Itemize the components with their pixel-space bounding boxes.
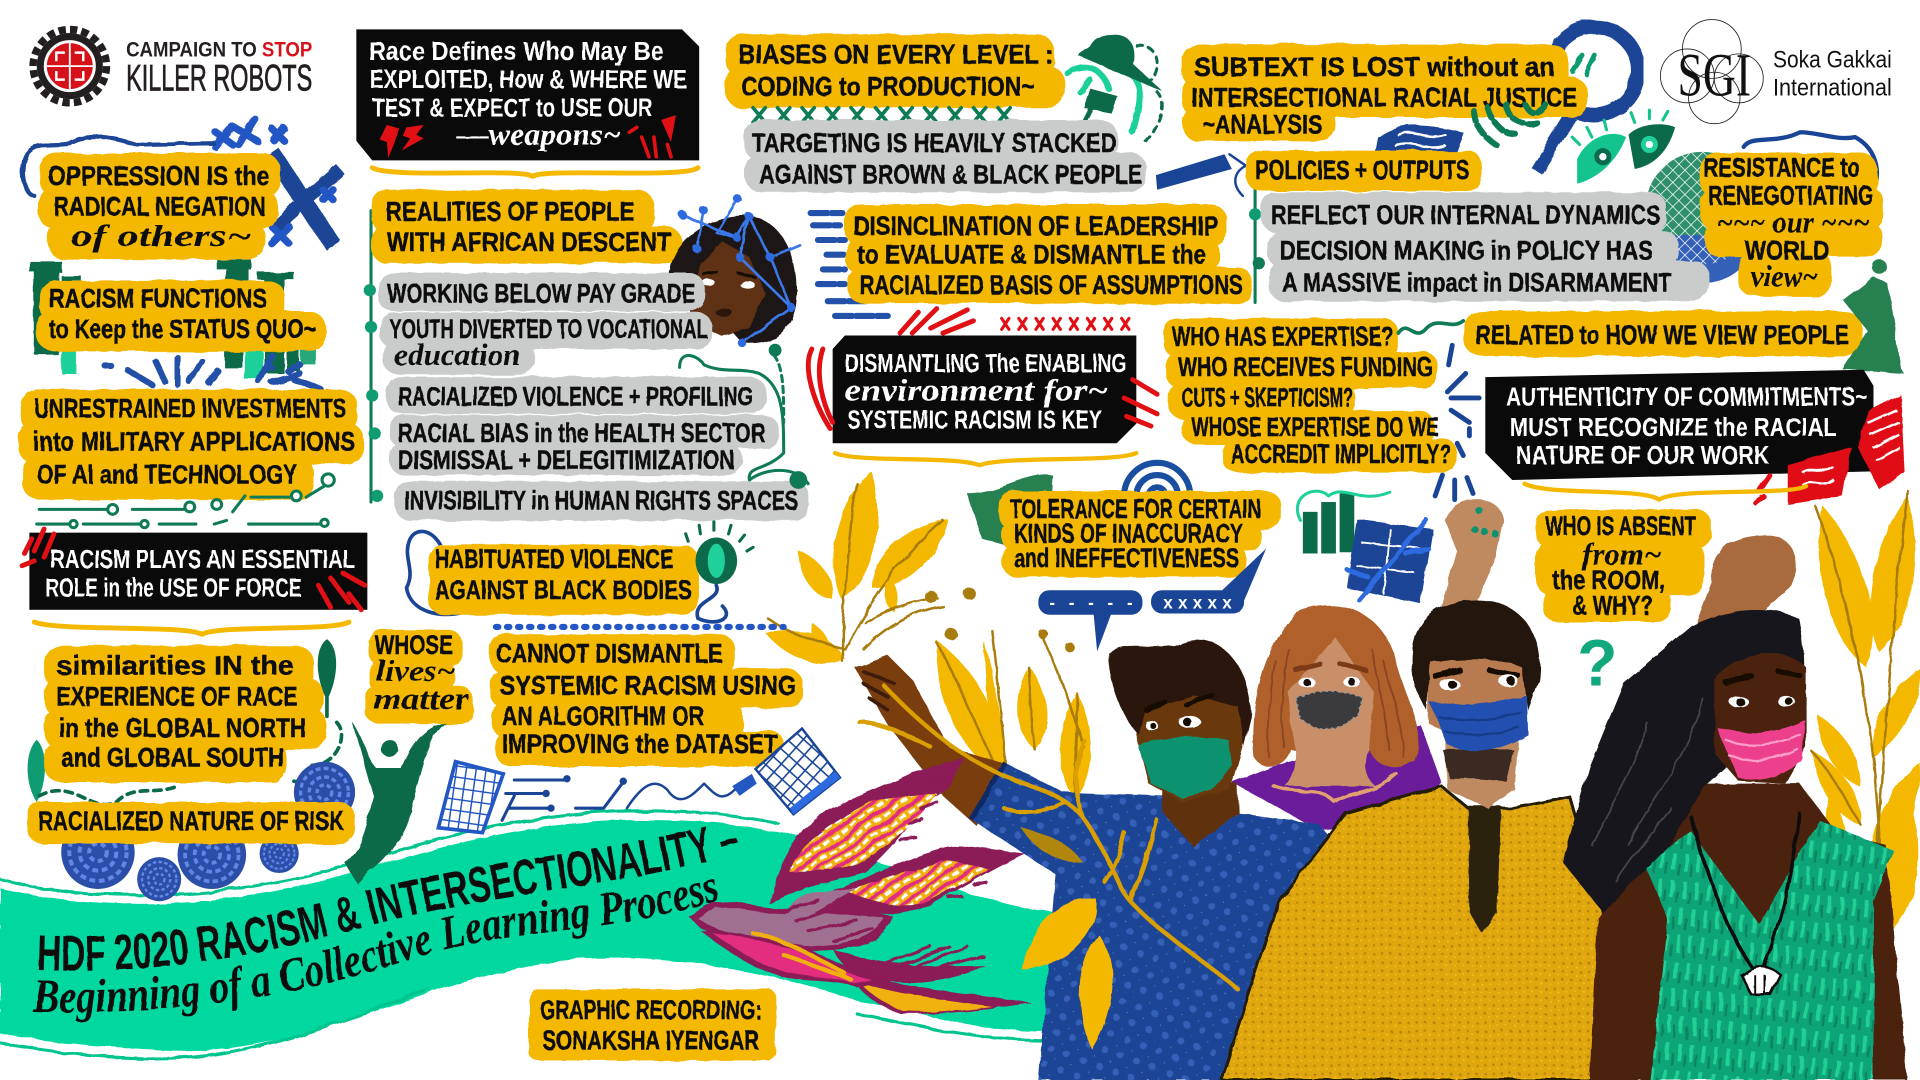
panel: whose lives matter: WHOSE — [375, 630, 453, 660]
panel: similarities in race experience — [44, 645, 327, 782]
panel: who has expertise: ACCREDIT IMPLICITLY? — [1231, 439, 1451, 469]
logo: Soka Gakkai International: International — [1773, 75, 1892, 102]
panel: whose lives matter: matter — [373, 682, 470, 716]
icon: blue flag and fingerprint — [1374, 104, 1545, 157]
panel: racism functions: RACISM FUNCTIONS — [49, 283, 267, 313]
panel: who is absent: WHO IS ABSENT — [1545, 511, 1696, 541]
panel: realities of people with african descent: REALITIES OF PEOPLE — [386, 196, 634, 226]
panel: race defines callout: TEST & EXPECT to USE OUR — [372, 94, 653, 122]
icon: green cross row — [753, 108, 1010, 122]
panel: unrestrained investments: OF AI and TECHNOLOGY — [37, 460, 298, 490]
green title banner — [0, 811, 1056, 1058]
panel: biases on every level — [725, 34, 1065, 108]
icon: blue splash marks — [104, 355, 321, 389]
panel: subtext is lost: SUBTEXT IS LOST without an — [1194, 52, 1555, 82]
panel: racialized nature of risk — [27, 802, 355, 844]
panel: racism functions: to Keep the STATUS QUO~ — [49, 314, 316, 344]
logo: Campaign to Stop Killer Robots: CAMPAIGN TO STOP — [126, 38, 312, 61]
list: working below pay grade: DISMISSAL + DELEGITIMIZATION — [398, 445, 735, 475]
icon: magnifying glass — [1537, 27, 1638, 171]
icon: blue textured balls — [61, 762, 355, 901]
panel: who is absent — [1536, 509, 1712, 622]
list: policy outcomes: REFLECT OUR INTERNAL DYNAMICS — [1271, 200, 1660, 230]
list: policy outcomes — [1261, 192, 1709, 301]
title text: racism and intersectionality: Beginning of a Collective Learning Process — [32, 879, 718, 1022]
panel: race defines callout: —weapons~ — [456, 117, 621, 151]
panel: subtext is lost — [1182, 44, 1587, 141]
panel: subtext is lost: INTERSECTIONAL RACIAL JUSTICE — [1191, 83, 1577, 113]
panel: tolerance for inaccuracy: TOLERANCE FOR CERTAIN — [1010, 494, 1261, 524]
bracket below authenticity — [1524, 484, 1806, 500]
plant: right side leaves — [1802, 491, 1920, 933]
plant: left sprigs — [761, 466, 976, 672]
person: woman with long hair and black mask — [1232, 605, 1441, 830]
panel: who has expertise: WHO RECEIVES FUNDING — [1178, 352, 1433, 382]
icon: blue splash near expertise — [1435, 345, 1479, 500]
person: man with blue mask and yellow kurta — [1221, 500, 1603, 1080]
bracket below race defines callout — [372, 168, 698, 176]
decoration: blue dotted rule — [496, 624, 784, 629]
panel: cannot dismantle: SYSTEMIC RACISM USING — [500, 670, 796, 700]
panel: dismantling the enabling environment — [808, 309, 1157, 443]
list: working below pay grade — [377, 273, 809, 520]
panel: resistance to renegotiating: view~ — [1751, 260, 1818, 294]
panel: racism functions — [37, 280, 326, 351]
icon: blue squiggle above resistance — [1744, 132, 1877, 184]
bracket below dismantling — [835, 453, 1136, 465]
icon: green figure with raised arms — [345, 722, 446, 884]
icon: green squiggle — [680, 345, 808, 487]
panel: tolerance for inaccuracy — [999, 491, 1281, 577]
panel: policies and outputs: POLICIES + OUTPUTS — [1255, 155, 1469, 185]
panel: disinclination of leadership: RACIALIZED BASIS OF ASSUMPTIONS — [860, 270, 1243, 300]
list: working below pay grade: YOUTH DIVERTED TO VOCATIONAL — [389, 314, 708, 344]
panel: who has expertise — [1163, 318, 1457, 473]
panel: oppression statement: OPPRESSION IS the — [48, 161, 269, 191]
icon: green pin markers with dashed trail — [28, 639, 342, 805]
panel: authenticity of commitments: NATURE OF OUR WORK — [1516, 442, 1770, 470]
panel: subtext is lost: ~ANALYSIS — [1202, 109, 1322, 139]
panel: dismantling the enabling environment: environment for~ — [845, 373, 1108, 407]
logo: Campaign to Stop Killer Robots — [33, 29, 312, 103]
panel: racism plays an essential role — [22, 529, 367, 610]
panel: resistance to renegotiating: RESISTANCE to — [1703, 152, 1860, 182]
panel: habituated violence: AGAINST BLACK BODIES — [435, 575, 692, 605]
credit: graphic recording: GRAPHIC RECORDING: — [540, 995, 762, 1025]
panel: resistance to renegotiating — [1700, 152, 1883, 296]
icon: speech bubbles: xxxxx — [1163, 593, 1232, 613]
panel: realities of people with african descent — [364, 190, 682, 502]
panel: targeting is heavily stacked — [743, 120, 1146, 192]
panel: oppression statement: of others~ — [71, 219, 251, 253]
list: policy outcomes: A MASSIVE impact in DISARMAMENT — [1282, 267, 1672, 297]
panel: race defines callout: Race Defines Who May Be — [369, 38, 664, 66]
icon: blue torn document — [1347, 519, 1433, 604]
icon: green eyes — [1572, 110, 1675, 184]
list: working below pay grade: WORKING BELOW PAY GRADE — [387, 278, 696, 308]
list: working below pay grade: RACIAL BIAS in the HEALTH SECTOR — [398, 418, 765, 448]
icon: blue pen — [1156, 154, 1247, 196]
panel: race defines callout: EXPLOITED, How & WHERE WE — [370, 66, 687, 94]
icon: blue keyboard grids and circuit — [438, 729, 840, 833]
icon: bar chart with trend line — [1297, 491, 1390, 553]
panel: similarities in race experience: in the GLOBAL NORTH — [59, 713, 306, 743]
panel: targeting is heavily stacked: TARGETING IS HEAVILY STACKED — [752, 128, 1117, 158]
list: working below pay grade: INVISIBILITY in HUMAN RIGHTS SPACES — [404, 485, 798, 515]
person: man with raised branch, green mask and blue shirt — [855, 640, 1347, 1080]
logo: Campaign to Stop Killer Robots: KILLER ROBOTS — [126, 58, 312, 99]
icon: green question mark: ? — [1577, 627, 1618, 701]
panel: realities of people with african descent: WITH AFRICAN DESCENT — [387, 227, 671, 257]
panel: tolerance for inaccuracy: and INEFFECTIVENESS — [1014, 543, 1239, 573]
logo: Soka Gakkai International: SGI — [1678, 42, 1751, 110]
panel: biases on every level: CODING to PRODUCTION~ — [741, 72, 1035, 102]
panel: racism plays an essential role: ROLE in the USE OF FORCE — [45, 574, 301, 602]
panel: whose lives matter — [365, 629, 473, 724]
panel: disinclination of leadership — [845, 204, 1253, 304]
icon: green book — [967, 475, 1053, 545]
person: woman with curly black hair, pink mask and green dress — [1562, 535, 1908, 1080]
plant: leaves behind the people — [919, 629, 1092, 799]
plant: branch held by the man — [860, 686, 1238, 1050]
panel: cannot dismantle: AN ALGORITHM OR — [502, 701, 704, 731]
panel: disinclination of leadership: to EVALUATE & DISMANTLE the — [857, 239, 1206, 269]
title text: racism and intersectionality: HDF 2020 RACISM & INTERSECTIONALITY – — [38, 826, 738, 971]
icon: speech bubbles — [1038, 549, 1266, 651]
logo: Soka Gakkai International — [1660, 20, 1892, 124]
panel: racialized nature of risk: RACIALIZED NATURE OF RISK — [38, 806, 345, 836]
icon: green columns behind status quo — [29, 260, 316, 380]
panel: policies and outputs — [1245, 151, 1483, 302]
list: policy outcomes: DECISION MAKING in POLICY HAS — [1280, 236, 1653, 266]
credit: graphic recording — [529, 989, 776, 1060]
panel: habituated violence: HABITUATED VIOLENCE — [435, 544, 673, 574]
panel: resistance to renegotiating: WORLD — [1745, 236, 1829, 266]
panel: unrestrained investments: UNRESTRAINED INVESTMENTS — [34, 394, 347, 424]
icon: green squiggle link — [1398, 321, 1463, 333]
icon: green plant drone — [1068, 34, 1163, 144]
panel: unrestrained investments: into MILITARY APPLICATIONS — [33, 427, 355, 457]
icon: speech bubbles: - - - - - — [1049, 593, 1133, 613]
bird illustration — [688, 758, 1032, 1014]
panel: oppression statement: RADICAL NEGATION — [54, 192, 266, 222]
panel: cannot dismantle: CANNOT DISMANTLE — [496, 638, 722, 668]
list: working below pay grade: education — [394, 338, 520, 372]
panel: authenticity of commitments — [1485, 370, 1873, 480]
panel: racism plays an essential role: RACISM PLAYS AN ESSENTIAL — [50, 546, 355, 574]
panel: targeting is heavily stacked: AGAINST BROWN & BLACK PEOPLE — [759, 160, 1142, 190]
icon: green circuit lines — [37, 474, 334, 528]
icon: green standing figure — [1843, 260, 1904, 373]
icon: blue dashes left of disinclination — [811, 213, 888, 316]
panel: who has expertise: WHO HAS EXPERTISE? — [1172, 321, 1393, 351]
panel: related to how we view people — [1463, 311, 1862, 356]
logo: Soka Gakkai International: Soka Gakkai — [1773, 46, 1892, 73]
panel: disinclination of leadership: DISINCLINATION OF LEADERSHIP — [853, 211, 1218, 241]
credit: graphic recording: SONAKSHA IYENGAR — [542, 1025, 759, 1055]
icon: blue swirl — [1124, 463, 1190, 496]
panel: resistance to renegotiating: ~~~ our ~~~ — [1717, 206, 1870, 240]
panel: habituated violence — [407, 531, 698, 615]
panel: unrestrained investments — [18, 389, 364, 500]
panel: who has expertise: CUTS + SKEPTICISM? — [1182, 383, 1353, 413]
panel: authenticity of commitments: MUST RECOGNIZE the RACIAL — [1510, 414, 1837, 442]
panel: cannot dismantle: IMPROVING the DATASET — [502, 729, 778, 759]
icon: green watching eye — [686, 522, 753, 622]
panel: who is absent: & WHY? — [1572, 591, 1653, 621]
list: working below pay grade: RACIALIZED VIOLENCE + PROFILING — [398, 381, 753, 411]
icon: blue crossed marks — [23, 119, 340, 245]
panel: similarities in race experience: and GLOBAL SOUTH — [61, 743, 284, 773]
panel: cannot dismantle — [490, 634, 802, 767]
panel: tolerance for inaccuracy: KINDS OF INACCURACY — [1014, 518, 1243, 548]
panel: similarities in race experience: EXPERIENCE OF RACE — [56, 681, 298, 711]
panel: dismantling the enabling environment: SYSTEMIC RACISM IS KEY — [847, 407, 1102, 435]
panel: dismantling the enabling environment: DISMANTLING The ENABLING — [845, 350, 1127, 378]
icon: red documents — [1755, 394, 1904, 504]
bracket below racism plays — [34, 622, 349, 634]
panel: who is absent: the ROOM, — [1553, 565, 1665, 595]
panel: oppression statement — [38, 153, 280, 260]
panel: who has expertise: WHOSE EXPERTISE DO WE — [1191, 412, 1439, 442]
panel: race defines callout — [356, 29, 699, 160]
panel: biases on every level: BIASES ON EVERY LEVEL : — [738, 40, 1053, 70]
panel: similarities in race experience: similarities IN the — [56, 651, 294, 681]
icon: portrait of woman with blue network — [669, 194, 800, 347]
icon: hatched globe — [1646, 152, 1758, 283]
panel: whose lives matter: lives~ — [376, 654, 456, 688]
panel: who is absent: from~ — [1582, 537, 1662, 571]
